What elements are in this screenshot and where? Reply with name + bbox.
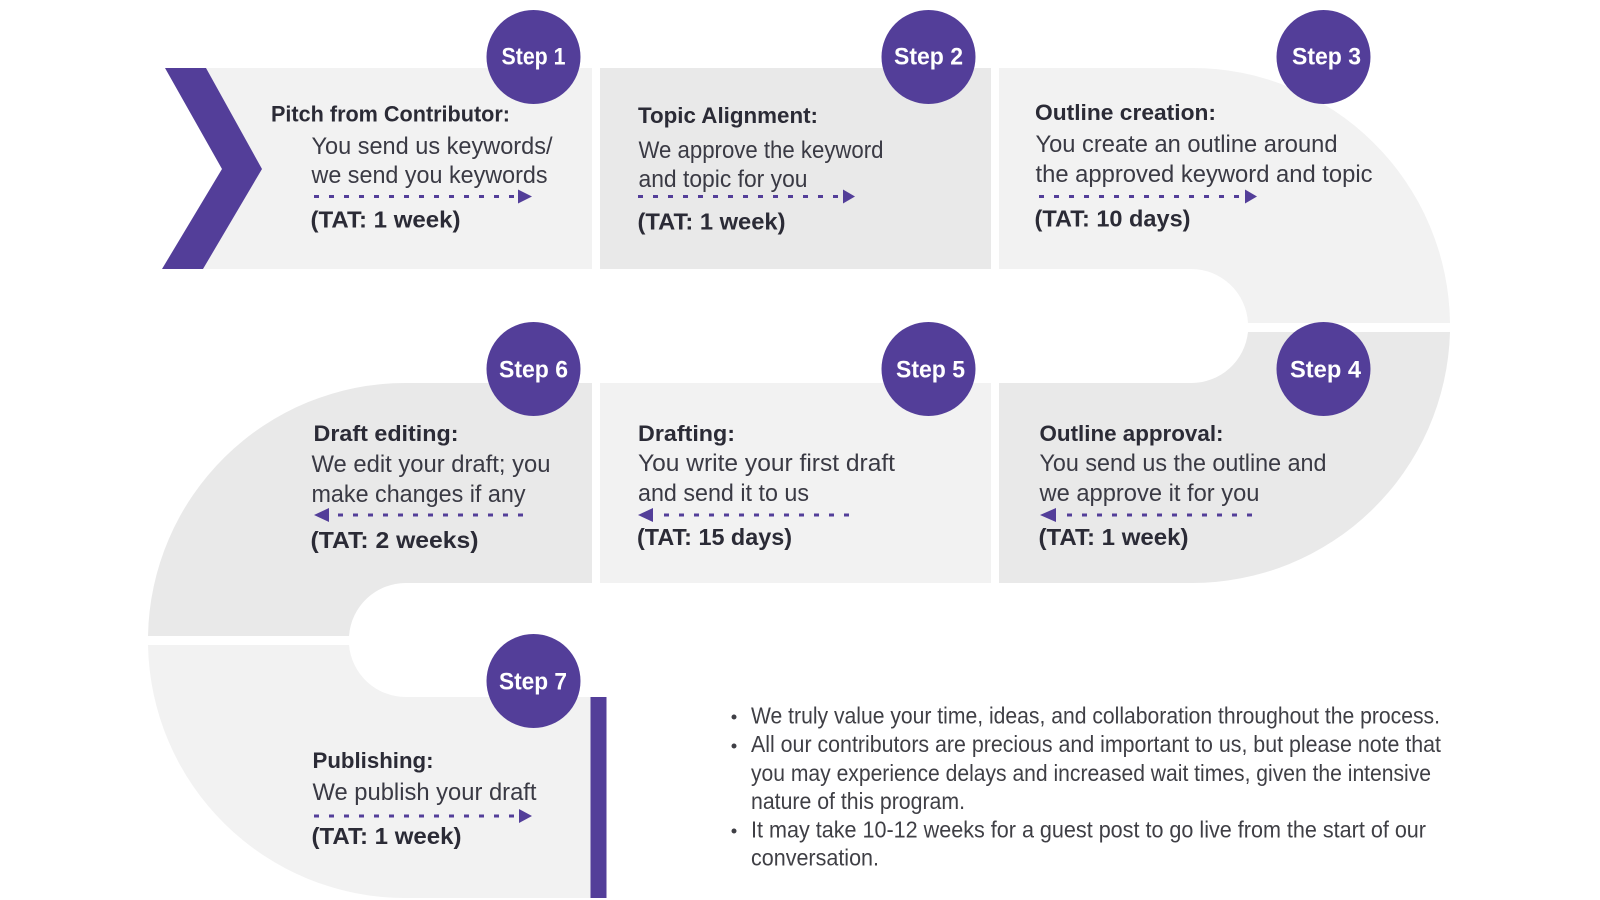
- step 2 description: [638, 137, 884, 193]
- step 1 description: You send us keywords/: [312, 133, 553, 160]
- step 1 description: [311, 133, 553, 189]
- notes: bullet list: [732, 702, 1442, 870]
- step 5 description: [638, 450, 895, 507]
- badge: step 1: [486, 10, 580, 104]
- badge: step 4: Step 4: [1290, 356, 1362, 384]
- badge: step 1: Step 1: [502, 44, 566, 70]
- badge: step 2: Step 2: [894, 44, 963, 70]
- badge: step 7: [486, 634, 580, 728]
- step 2 turnaround time: (TAT: 1 week): [638, 208, 786, 234]
- step 6 turnaround time: (TAT: 2 weeks): [310, 527, 478, 553]
- step 6 description: [312, 451, 550, 508]
- notes: bullet list: We truly value your time, ideas, and collaboration throughout the process.: [751, 702, 1440, 728]
- step 7 heading: Publishing:: [312, 748, 434, 773]
- badge: step 3: Step 3: [1292, 44, 1361, 70]
- step 4 description: we approve it for you: [1039, 480, 1260, 507]
- step 7 turnaround time: (TAT: 1 week): [312, 823, 462, 849]
- step 6 heading: Draft editing:: [314, 421, 458, 446]
- arrow: step 2 dotted right: [638, 190, 855, 204]
- arrow: step 7 dotted right: [314, 809, 532, 823]
- panel: step 6 draft editing: [148, 383, 592, 636]
- badge: step 6: [486, 322, 580, 416]
- step 3 description: You create an outline around: [1036, 131, 1338, 158]
- panel: step 3 outline creation: [999, 68, 1450, 323]
- arrow: step 3 dotted right: [1039, 190, 1257, 204]
- notes: bullet list: It may take 10-12 weeks for a guest post to go live from the start of our: [751, 816, 1426, 842]
- arrow: step 4 dotted left: [1040, 508, 1254, 522]
- badge: step 6: Step 6: [499, 356, 568, 384]
- step 3 heading: Outline creation:: [1035, 100, 1216, 125]
- step 7 description: We publish your draft: [312, 779, 537, 806]
- badge: step 3: [1276, 10, 1370, 104]
- notes: bullet list: conversation.: [751, 844, 879, 870]
- step 3 description: the approved keyword and topic: [1036, 161, 1372, 188]
- notes: bullet list: you may experience delays and increased wait times, given the intensive: [751, 760, 1431, 786]
- panel: step 7 publishing: [148, 645, 606, 898]
- step 3 turnaround time: (TAT: 10 days): [1034, 206, 1190, 232]
- arrow: step 1 dotted right: [314, 190, 532, 204]
- step 2 description: and topic for you: [638, 166, 808, 193]
- step 5 turnaround time: (TAT: 15 days): [637, 524, 792, 550]
- badge: step 5: Step 5: [896, 356, 965, 384]
- arrow: step 5 dotted left: [638, 508, 851, 522]
- step 5 description: and send it to us: [638, 480, 809, 507]
- step 1 heading: Pitch from Contributor:: [271, 102, 510, 126]
- panel: step 1 pitch from contributor: [162, 68, 592, 269]
- step 4 heading: Outline approval:: [1040, 421, 1224, 446]
- panel: step 2 topic alignment: [600, 68, 991, 269]
- badge: step 2: [882, 10, 976, 104]
- notes: bullet list: All our contributors are precious and important to us, but please note that: [751, 731, 1442, 757]
- step 2 description: We approve the keyword: [638, 137, 884, 164]
- panel: step 4 outline approval: [999, 332, 1450, 583]
- arrow: step 6 dotted left: [314, 508, 526, 522]
- step 3 description: [1036, 131, 1372, 188]
- step 2 heading: Topic Alignment:: [638, 103, 818, 128]
- step 4 description: You send us the outline and: [1040, 450, 1326, 477]
- badge: step 7: Step 7: [499, 668, 567, 696]
- step 4 turnaround time: (TAT: 1 week): [1038, 524, 1188, 550]
- panel: step 5 drafting: [600, 383, 991, 583]
- step 4 description: [1039, 450, 1326, 507]
- step 5 description: You write your first draft: [638, 450, 895, 477]
- badge: step 5: [882, 322, 976, 416]
- step 1 turnaround time: (TAT: 1 week): [310, 206, 460, 232]
- end bar: [590, 697, 606, 898]
- step 5 heading: Drafting:: [638, 421, 735, 446]
- icon: start chevron: [162, 68, 262, 269]
- step 6 description: make changes if any: [312, 481, 526, 508]
- notes: bullet list: nature of this program.: [751, 788, 965, 814]
- badge: step 4: [1276, 322, 1370, 416]
- step 6 description: We edit your draft; you: [312, 451, 550, 478]
- step 1 description: we send you keywords: [311, 162, 548, 189]
